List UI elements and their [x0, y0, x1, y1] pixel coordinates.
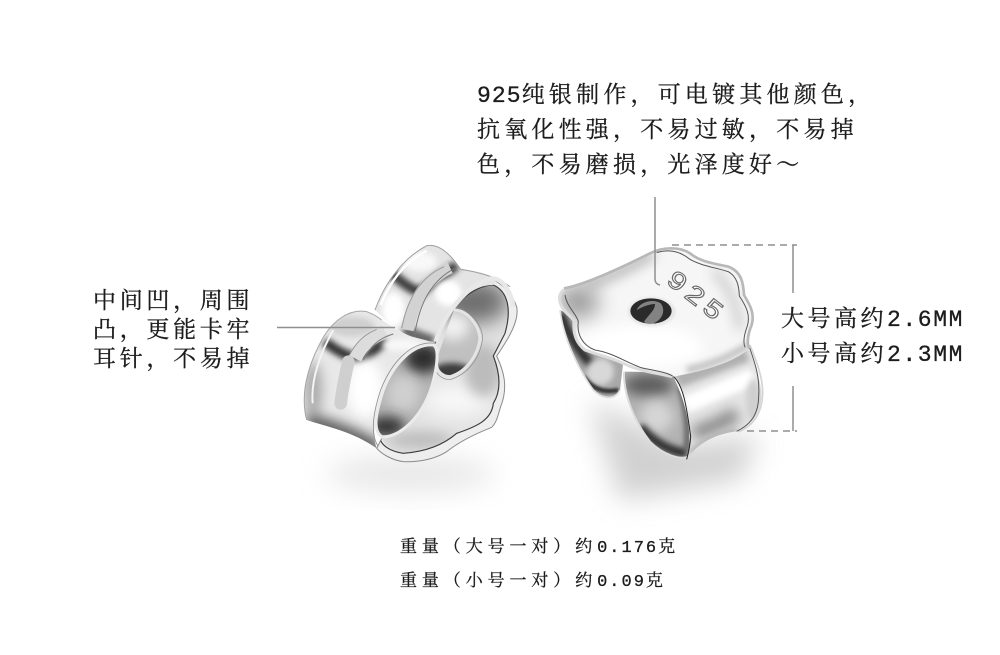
leader line: centre groove — [277, 326, 395, 328]
text: groove note: 中间凹，周围 — [93, 288, 253, 315]
rear cylinder outline — [375, 245, 510, 310]
text: groove note — [93, 288, 253, 373]
rear cylinder rim — [436, 278, 513, 342]
top face with 925 stamp — [561, 250, 752, 377]
plate interior — [382, 286, 508, 452]
face outline — [564, 248, 753, 348]
rear tube opening — [438, 310, 478, 376]
height dimension marker — [672, 245, 797, 431]
text: height note: 小号高约2.3MM — [781, 341, 964, 368]
front cylinder outline — [304, 311, 382, 420]
text: height note: 大号高约2.6MM — [781, 306, 964, 333]
text: silver material note — [477, 82, 875, 179]
shadow: right ear nut — [590, 400, 760, 500]
band edges — [672, 375, 691, 459]
stamped hole — [628, 297, 676, 326]
text: weight note — [400, 537, 675, 592]
ear nut: left view — [297, 240, 520, 462]
text: silver material note: 色，不易磨损，光泽度好～ — [477, 152, 803, 179]
front cylinder opening — [378, 346, 436, 436]
small tube rim — [560, 310, 620, 397]
ear nut: right view — [553, 243, 767, 463]
plate inner edge line — [381, 285, 508, 453]
text: silver material note: 抗氧化性强，不易过敏，不易掉 — [477, 117, 858, 144]
text: weight note: 重量（大号一对）约0.176克 — [400, 537, 675, 558]
rear plate rim — [377, 269, 517, 462]
text: weight note: 重量（小号一对）约0.09克 — [400, 571, 663, 592]
front cylinder band — [304, 312, 429, 448]
front opening rim — [376, 345, 437, 437]
lower tube opening — [624, 372, 690, 457]
side band — [674, 348, 762, 456]
small left tube — [560, 310, 623, 397]
text: height note — [781, 306, 964, 368]
text: groove note: 凸，更能卡牢 — [93, 317, 253, 344]
stamp: 925 digits: 925 — [662, 265, 733, 329]
text: silver material note: 925纯银制作，可电镀其他颜色， — [477, 82, 875, 109]
rear cylinder band — [375, 246, 494, 342]
lower tube rim — [624, 372, 688, 458]
rear tube rim — [437, 310, 480, 377]
text: groove note: 耳针，不易掉 — [93, 346, 253, 373]
shadow: left ear nut — [325, 456, 495, 492]
leader line: 925 stamp — [655, 197, 660, 285]
